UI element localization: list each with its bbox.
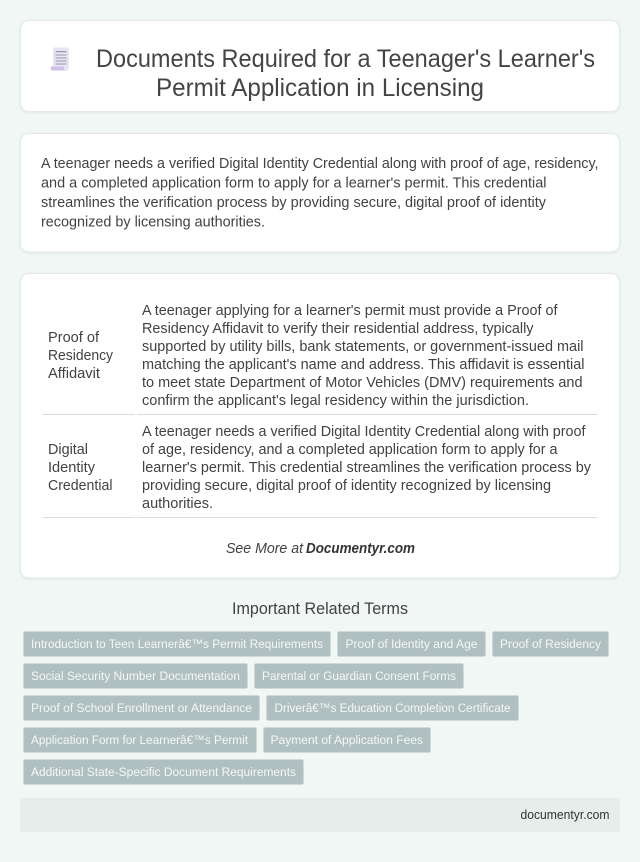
panel: title card [20, 20, 620, 112]
panel: introduction card [20, 134, 620, 252]
tag list [24, 632, 608, 784]
row description: Residency Affidavit to verify their residential address, typically [142, 321, 534, 337]
tag: Payment of Application Fees [270, 733, 423, 747]
tag [338, 632, 486, 656]
tag [24, 728, 256, 752]
tag [266, 696, 518, 720]
intro paragraph: and a completed application form to apply for a learner's permit. This credential [41, 176, 546, 192]
row description: matching the applicant's name and address. This affidavit is essential [142, 357, 584, 373]
tag [24, 696, 260, 720]
row description: confirm the applicant's legal residency within the jurisdiction. [142, 393, 529, 409]
tag: Proof of Identity and Age [346, 637, 478, 651]
icon: document scroll [50, 48, 69, 70]
tag [24, 760, 304, 784]
row label: Credential [48, 478, 112, 494]
tag [24, 632, 330, 656]
panel: documents table card [20, 274, 620, 578]
row: proof of residency affidavit [48, 303, 584, 409]
tag [264, 728, 430, 752]
row label: Affidavit [48, 366, 100, 382]
footer bar [20, 798, 620, 832]
see more link [226, 541, 415, 557]
intro paragraph: A teenager needs a verified Digital Identity Credential along with proof of age, residency, [41, 156, 598, 172]
tag: Social Security Number Documentation [31, 669, 240, 683]
intro paragraph: recognized by licensing authorities. [41, 214, 265, 230]
row description [142, 424, 592, 512]
title: Documents Required for a Teenager's Learner's [96, 45, 595, 73]
row description: A teenager applying for a learner's permit must provide a Proof of [142, 303, 558, 319]
row description: authorities. [142, 496, 213, 512]
tag: Proof of School Enrollment or Attendance [31, 701, 252, 715]
row description: to meet state Department of Motor Vehicles (DMV) requirements and [142, 375, 582, 391]
tag [24, 664, 248, 688]
row label: Identity [48, 460, 96, 476]
tag: Parental or Guardian Consent Forms [262, 669, 456, 683]
tag: Application Form for Learnerâ€™s Permit [31, 733, 249, 747]
row label [48, 330, 114, 382]
tag [492, 632, 608, 656]
row description [142, 303, 584, 409]
tag: Introduction to Teen Learnerâ€™s Permit Requirements [31, 637, 323, 651]
row label [48, 442, 112, 494]
heading: important related terms: Important Related Terms [232, 600, 408, 618]
row: digital identity credential [48, 424, 592, 512]
row label: Residency [48, 348, 114, 364]
row description: learner's permit. This credential streamlines the verification process by [142, 460, 592, 476]
row description: of age, residency, and a completed application form to apply for a [142, 442, 558, 458]
row description: providing secure, digital proof of identity recognized by licensing [142, 478, 551, 494]
see more link: See More at [226, 541, 304, 557]
row description: A teenager needs a verified Digital Identity Credential along with proof [142, 424, 586, 440]
intro paragraph [41, 156, 598, 230]
row label: Digital [48, 442, 88, 458]
row description: supported by utility bills, bank statements, or government-issued mail [142, 339, 584, 355]
tag: Driverâ€™s Education Completion Certificate [274, 701, 511, 715]
see more link: Documentyr.com [306, 541, 415, 557]
tag [254, 664, 464, 688]
title: Permit Application in Licensing [156, 74, 484, 102]
tag: Proof of Residency [500, 637, 602, 651]
row label: Proof of [48, 330, 100, 346]
intro paragraph: streamlines the verification process by providing secure, digital proof of identity [41, 195, 547, 211]
title [96, 45, 595, 102]
tag: Additional State-Specific Document Requirements [31, 765, 296, 779]
footer domain: documentyr.com [520, 807, 610, 822]
